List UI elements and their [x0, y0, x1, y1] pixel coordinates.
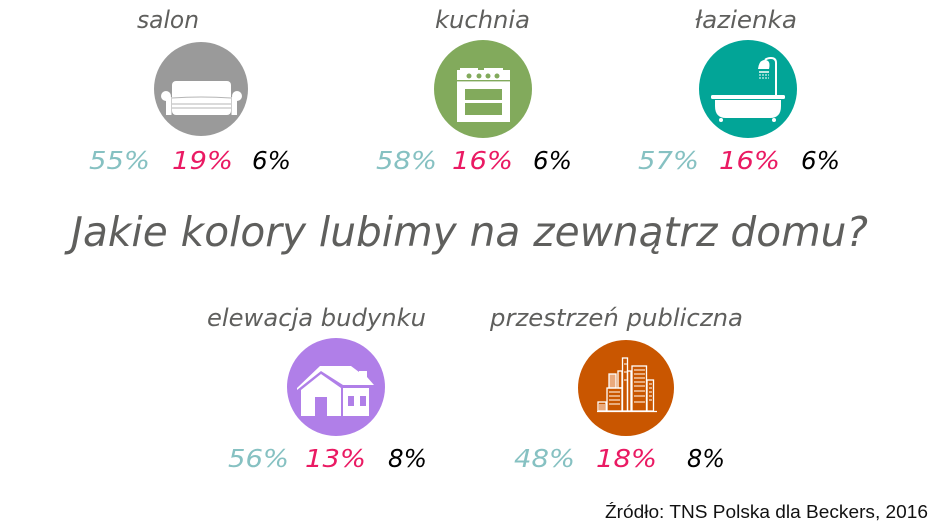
stats: kuchnia — [376, 146, 572, 175]
stats: salon: 6% — [252, 146, 291, 175]
stats: przestrzeń publiczna: 18% — [596, 444, 657, 473]
stats: salon: 19% — [172, 146, 233, 175]
stats: przestrzeń publiczna — [514, 444, 725, 473]
stats: kuchnia: 58% — [376, 146, 437, 175]
label: łazienka: łazienka — [695, 6, 797, 34]
stats: elewacja budynku: 8% — [388, 444, 427, 473]
icon: bathtub with shower — [699, 40, 797, 138]
stats: elewacja budynku: 13% — [305, 444, 366, 473]
stats: kuchnia: 6% — [533, 146, 572, 175]
stats: elewacja budynku: 56% — [228, 444, 289, 473]
icon: sofa — [154, 42, 248, 136]
stats: łazienka: 57% — [638, 146, 699, 175]
stats: salon: 55% — [89, 146, 150, 175]
stats: łazienka — [638, 146, 840, 175]
icon: oven — [434, 40, 532, 138]
stats: łazienka: 16% — [719, 146, 780, 175]
label: elewacja budynku: elewacja budynku — [207, 304, 426, 332]
icon: house — [287, 338, 385, 436]
stats: elewacja budynku — [228, 444, 427, 473]
stats: łazienka: 6% — [801, 146, 840, 175]
icon: city buildings — [578, 340, 674, 436]
stats: salon — [89, 146, 291, 175]
label: salon: salon — [137, 6, 199, 34]
label: kuchnia: kuchnia — [435, 6, 530, 34]
stats: przestrzeń publiczna: 8% — [687, 444, 725, 473]
stats: kuchnia: 16% — [452, 146, 513, 175]
heading: Jakie kolory lubimy na zewnątrz domu? — [64, 208, 868, 256]
source note: Źródło: TNS Polska dla Beckers, 2016 — [605, 502, 928, 522]
stats: przestrzeń publiczna: 48% — [514, 444, 575, 473]
label: przestrzeń publiczna: przestrzeń publiczna — [489, 304, 743, 332]
